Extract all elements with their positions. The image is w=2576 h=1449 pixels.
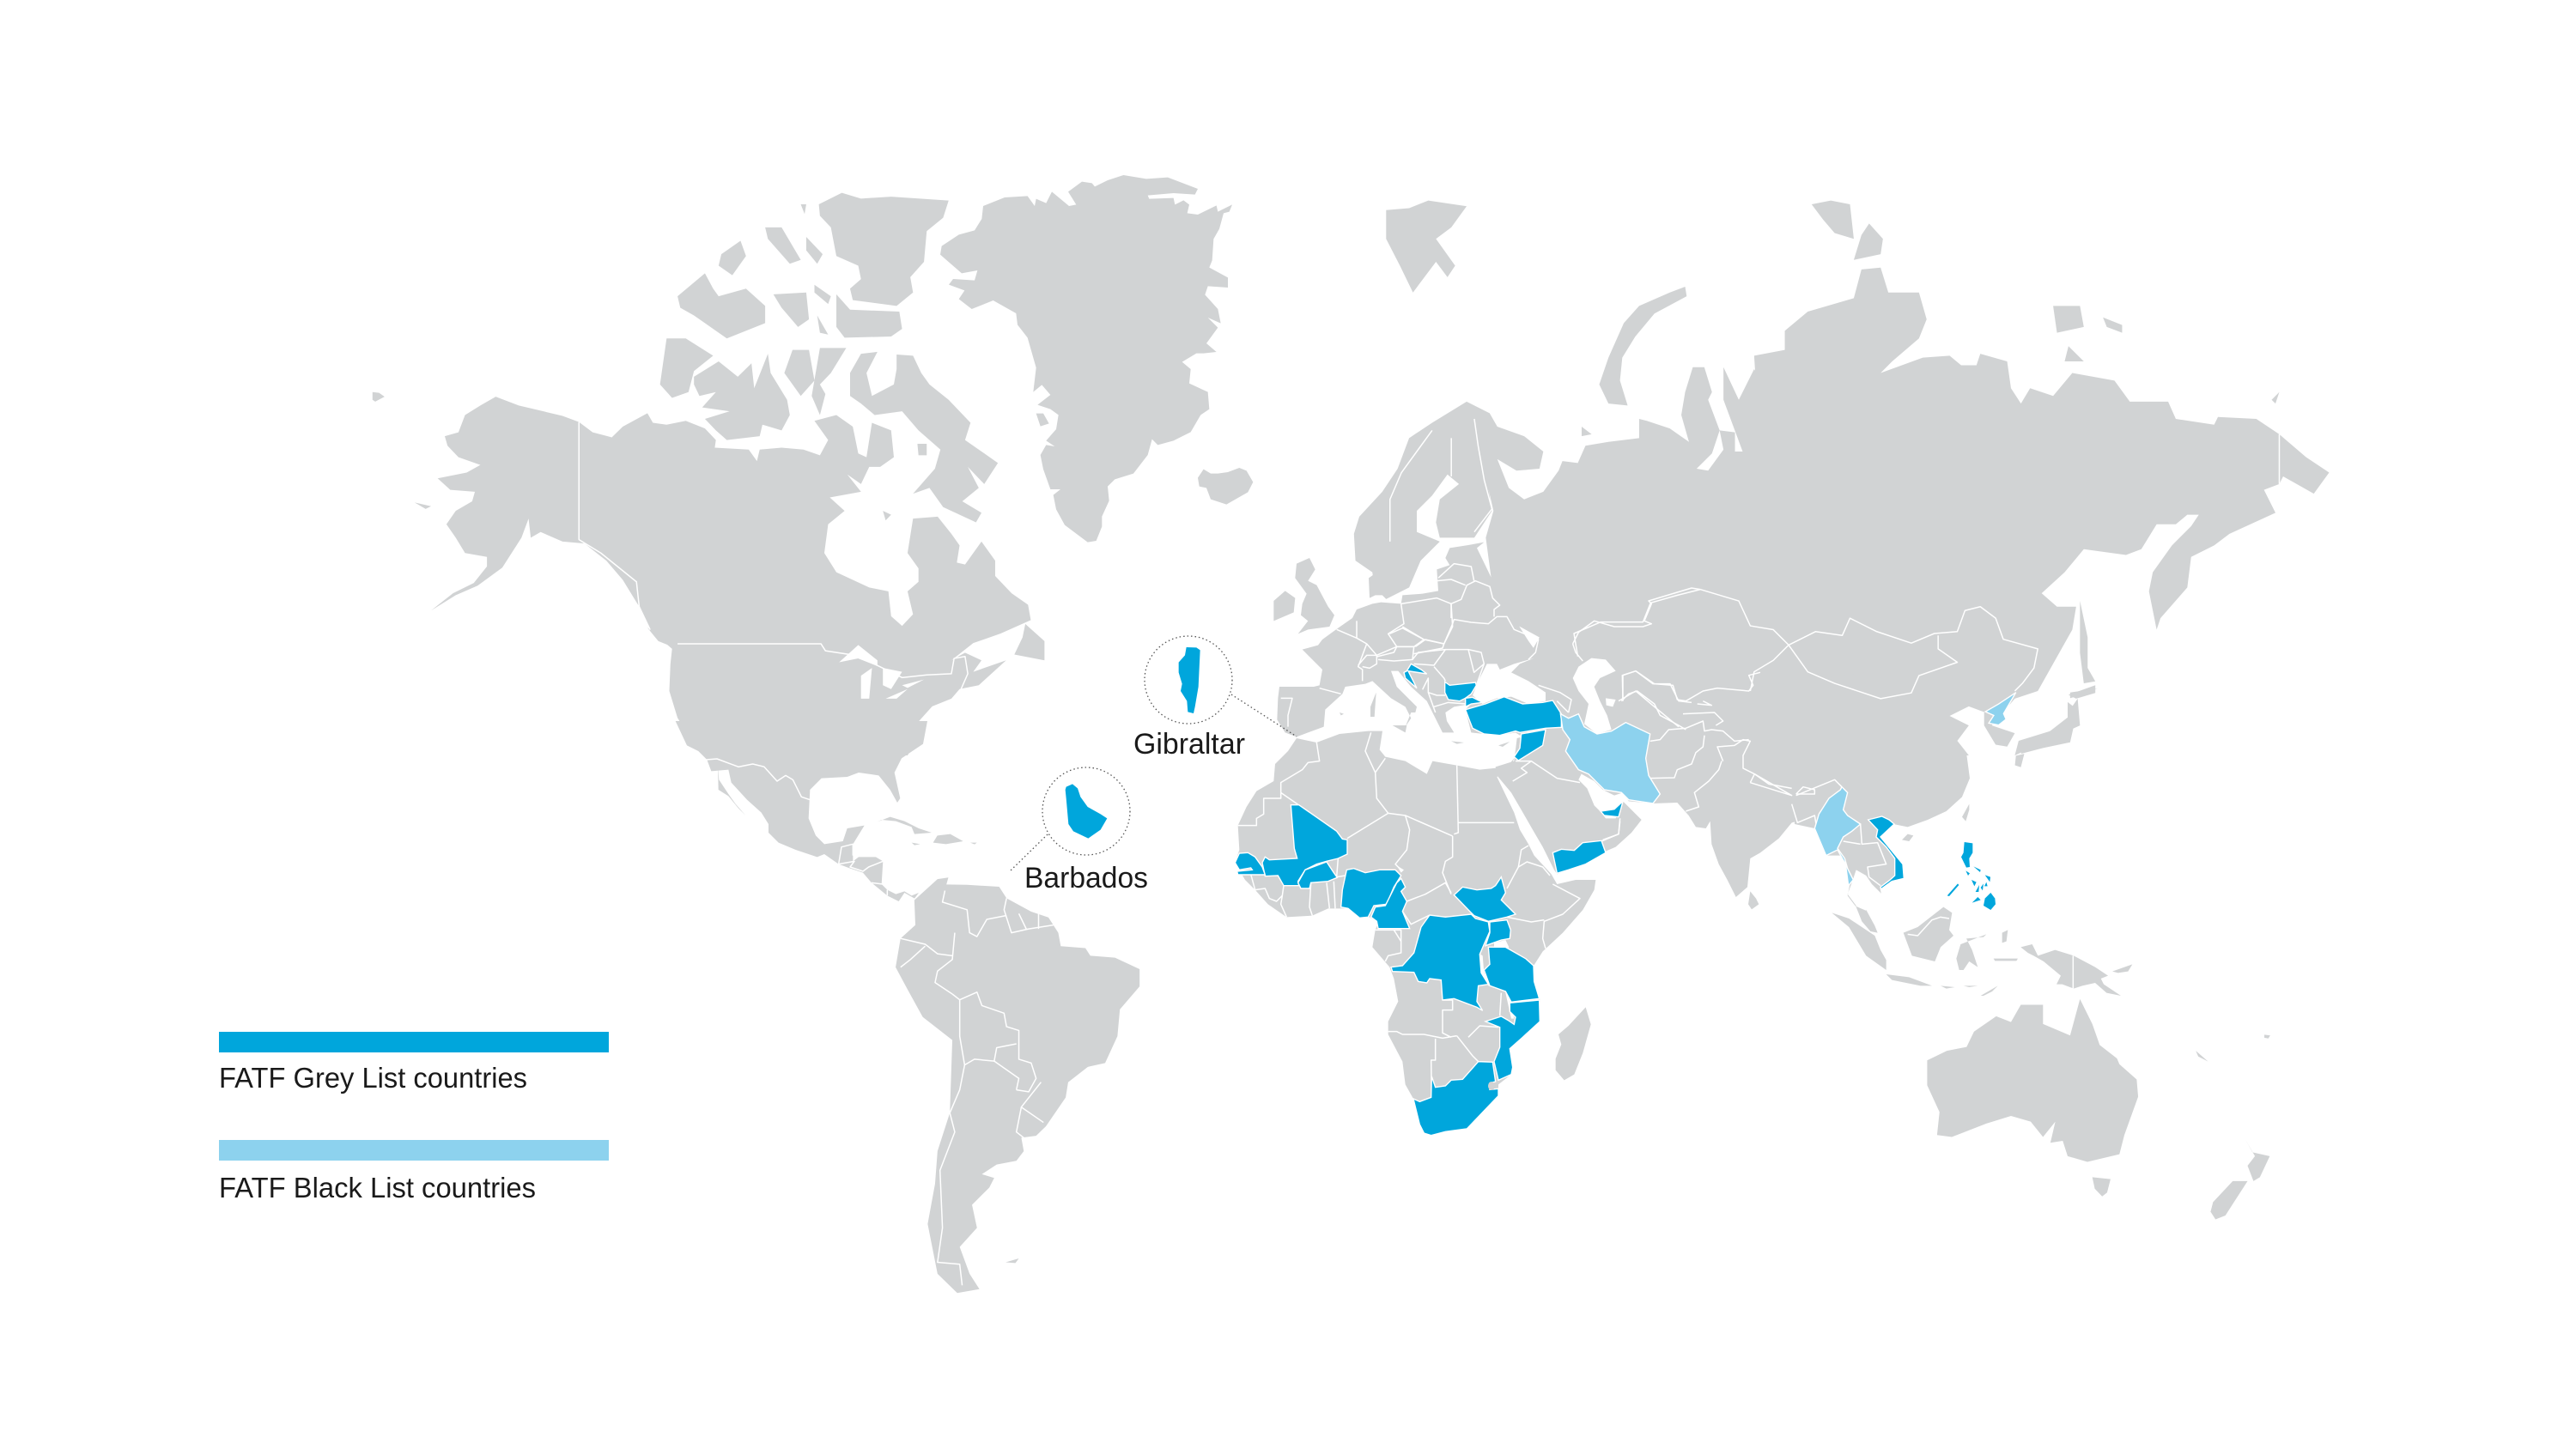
land: Africa and Madagascar <box>1235 731 1595 1136</box>
grey list countries: Europe and Middle East <box>1404 664 1561 761</box>
legend: FATF Grey List countries: FATF Grey List countries <box>219 1062 527 1094</box>
label: Barbados: Barbados <box>1024 862 1148 894</box>
grey list: Philippines <box>1947 842 1996 910</box>
land: Australia, New Zealand and Japan <box>1927 688 2270 1219</box>
legend: FATF Grey List countries <box>219 1032 609 1094</box>
black list: Myanmar <box>1814 787 1861 886</box>
grey list: South Africa <box>1413 1062 1498 1136</box>
grey list: Turkey (Anatolia) <box>1466 697 1561 736</box>
land: China coast, South-East Asia and Indonesia <box>1795 753 2132 996</box>
grey list countries: South-East Asia <box>1868 816 1996 910</box>
grey list: Vietnam <box>1868 816 1904 894</box>
grey list: Turkey (Thrace) <box>1466 697 1483 706</box>
black list: Iran <box>1560 714 1660 803</box>
grey list countries: Africa and Arabia <box>1235 801 1623 1136</box>
callout: Barbados <box>1009 767 1148 894</box>
grey list: Mozambique <box>1485 1000 1540 1080</box>
grey list: Burkina Faso <box>1298 862 1337 888</box>
land: South America <box>896 877 1139 1293</box>
icon: Gibraltar shape <box>1179 647 1200 713</box>
land: Middle East and South Asia <box>1496 670 1889 909</box>
land: continental Europe and Anatolia <box>1273 543 1569 747</box>
land: Mexico, Central America and Caribbean <box>676 721 977 901</box>
label: Gibraltar: Gibraltar <box>1133 728 1245 761</box>
grey list: Democratic Republic of the Congo <box>1391 914 1490 1010</box>
grey list: Bulgaria <box>1445 682 1476 701</box>
legend: FATF Black List countries: FATF Black List countries <box>219 1172 536 1203</box>
land: Russia, northern Asia and Scandinavia <box>1354 201 2330 755</box>
grey list: Yemen <box>1552 840 1606 873</box>
grey list: Mali <box>1262 805 1347 886</box>
land: North America and Arctic Canada <box>373 193 1044 755</box>
legend: FATF Black List countries <box>219 1140 609 1203</box>
grey list: Nigeria <box>1341 869 1401 918</box>
grey list: Croatia <box>1404 664 1427 688</box>
black list: North Korea <box>1985 693 2016 725</box>
icon: Barbados shape <box>1066 784 1107 839</box>
grey list: United Arab Emirates <box>1601 801 1623 817</box>
callout: Gibraltar <box>1133 636 1297 761</box>
grey list: Cameroon <box>1371 878 1410 929</box>
grey list: South Sudan <box>1454 877 1516 921</box>
grey list: Uganda <box>1485 920 1510 946</box>
icon: eSwatini enclave <box>1488 1082 1495 1090</box>
land: Greenland and Iceland <box>940 175 1253 543</box>
grey list: Senegal <box>1235 852 1265 875</box>
grey list: Syria <box>1514 730 1546 761</box>
grey list: Tanzania <box>1484 947 1540 1002</box>
